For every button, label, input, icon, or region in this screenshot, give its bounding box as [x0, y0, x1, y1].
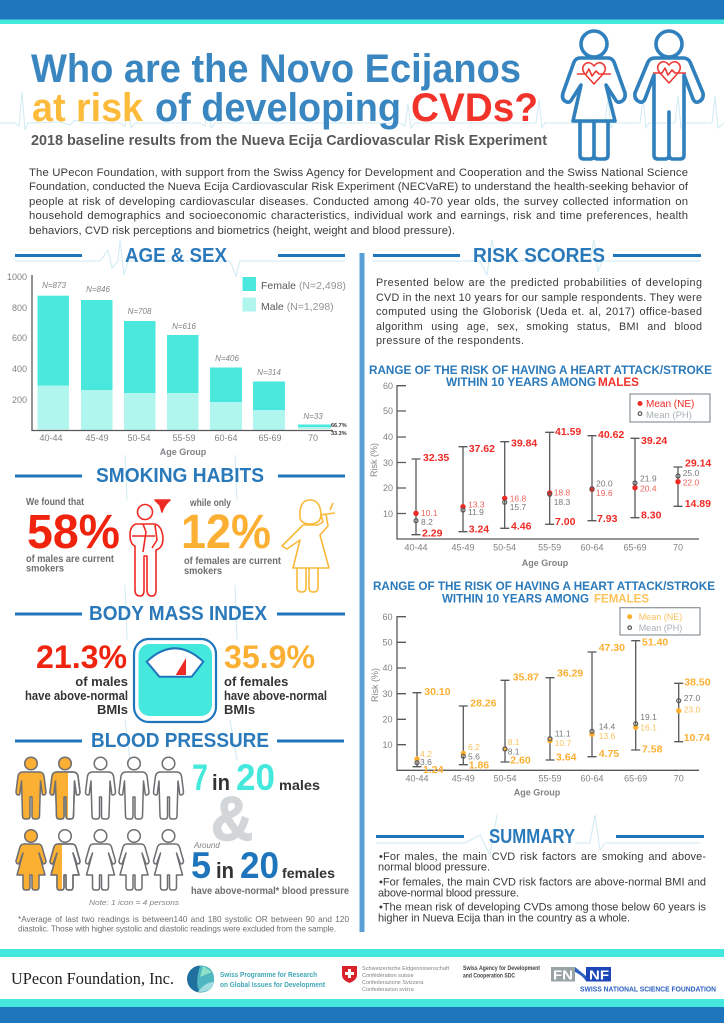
- range chart: males: 19.6: [596, 488, 613, 498]
- range chart: males: 21.9: [640, 474, 657, 484]
- stat: 7 in 20 males: [192, 757, 320, 798]
- panel: male smokers: of males are current: [26, 554, 115, 565]
- risk scores description: pressure of the respondents.: [376, 335, 524, 347]
- bar chart: age and sex: 1000: [7, 272, 27, 282]
- logo: FNS SNF: [551, 967, 716, 994]
- range chart: males: 11.9: [468, 507, 484, 517]
- panel: female BMI: BMIs: [224, 702, 255, 717]
- range chart: females: 50: [382, 638, 392, 648]
- risk scores description: CVD in the next 10 years for our sample respondents. They were: [376, 292, 702, 304]
- range chart: females: Age Group: [514, 788, 561, 798]
- range chart: males: 40-44: [404, 543, 428, 553]
- range chart: females: 4.2: [420, 749, 432, 759]
- range chart: males: 15.7: [510, 502, 527, 512]
- range chart: males: 3.24: [469, 524, 489, 536]
- range chart: males: 8.30: [641, 510, 662, 522]
- bar chart: age and sex: 33.3%: [331, 431, 347, 437]
- footnote: [18, 915, 349, 934]
- stat: 5 in 20 females: females: [282, 865, 335, 881]
- range chart: females: 8.1: [508, 746, 520, 756]
- range chart: males: 45-49: [451, 543, 475, 553]
- range chart: females: 3.64: [556, 752, 577, 764]
- bar chart: age and sex: N=846: [86, 285, 110, 294]
- range chart: males: 20: [383, 483, 393, 493]
- stat: 5 in 20 females: 5: [191, 845, 211, 886]
- stat: 7 in 20 males: in: [212, 770, 230, 795]
- range chart: females: 13.6: [599, 731, 616, 741]
- range chart: females: 6.2: [468, 742, 480, 752]
- logo: Swiss Confederation: Confederaziun svizra: [362, 987, 415, 993]
- range chart: females: 30: [382, 689, 392, 699]
- heading: body mass index: [15, 603, 345, 625]
- intro paragraph: The UPecon Foundation, with support from the Swiss Agency for Development and Cooperation and the Swiss National Science: [29, 167, 688, 179]
- icon: female smoker: [282, 500, 335, 592]
- logo: Swiss Confederation: [342, 966, 449, 993]
- logo: Swiss Programme: on Global Issues for Development: [220, 982, 326, 989]
- bar chart: age and sex: Age Group: [160, 447, 207, 457]
- intro paragraph: people at risk of developing cardiovascular diseases. Conducted among 40-70 year olds, the survey collected information on: [29, 196, 688, 208]
- bar chart: age and sex: [7, 272, 347, 457]
- range chart: females: 4.75: [599, 748, 619, 760]
- range chart: males: 20.4: [640, 484, 657, 494]
- range chart: females: 50-54: [493, 774, 517, 784]
- range chart: females: 60: [382, 612, 392, 622]
- range chart: males: 8.2: [421, 517, 433, 527]
- bar chart: age and sex: 70: [308, 433, 318, 443]
- heading: blood pressure: BLOOD PRESSURE: [91, 730, 269, 752]
- range chart: females: 35.87: [513, 672, 539, 684]
- range chart: males: 40.62: [598, 429, 624, 441]
- bar chart: age and sex: 66.7%: [331, 423, 347, 429]
- range chart: females: 16.1: [640, 723, 657, 733]
- logo: UPecon Foundation: UPecon Foundation, Inc.: [11, 969, 174, 988]
- panel: male BMI: 21.3%: [36, 639, 127, 675]
- range chart: males: 25.0: [683, 468, 700, 478]
- logo: Swiss Confederation: Schweizerische Eidgenossenschaft: [362, 966, 449, 972]
- pictogram: males with high blood pressure: [16, 757, 184, 819]
- bar chart: age and sex: N=873: [42, 281, 66, 290]
- range chart: males: 50: [383, 406, 393, 416]
- range chart: females: 45-49: [452, 774, 475, 784]
- range chart: males: 14.89: [685, 498, 711, 510]
- heading: age & sex: AGE & SEX: [125, 245, 228, 267]
- chart title: females: [373, 579, 715, 606]
- panel: female BMI: have above-normal: [224, 688, 327, 703]
- range chart: males: 30: [383, 458, 393, 468]
- range chart: females: 10.74: [684, 732, 710, 744]
- range chart: females: 23.0: [684, 705, 701, 715]
- range chart: females: 10.7: [555, 738, 572, 748]
- chart title: females: RANGE OF THE RISK OF HAVING A HEART ATTACK/STROKE: [373, 579, 715, 593]
- range chart: males: Mean (NE): [646, 399, 694, 410]
- panel: male BMI: [25, 639, 128, 717]
- heading: smoking habits: SMOKING HABITS: [96, 465, 264, 487]
- range chart: males: 65-69: [623, 543, 647, 553]
- logo: FNS SNF: FN: [553, 968, 573, 982]
- stat: 7 in 20 males: 20: [236, 757, 275, 798]
- range chart: females: 36.29: [557, 668, 583, 680]
- range chart: females: 2.60: [510, 754, 531, 766]
- summary bullets: [378, 851, 706, 925]
- panel: female BMI: of females: [224, 674, 288, 689]
- logo: Swiss Confederation: Confédération suisse: [362, 973, 414, 979]
- logo: SDC: Swiss Agency for Development: [463, 966, 540, 972]
- range chart: females: 20: [382, 714, 392, 724]
- range chart: females: 5.6: [468, 751, 480, 761]
- footnote: *Average of last two readings is between140 and 180 systolic OR between 90 and 120: [18, 915, 349, 924]
- panel: female BMI: 35.9%: [224, 639, 315, 675]
- range chart: females: 27.0: [684, 693, 701, 703]
- range chart: females: 10: [382, 740, 392, 750]
- range chart: males: 50-54: [493, 543, 516, 553]
- heading: summary: [376, 826, 704, 848]
- range chart: females: 30.10: [424, 686, 451, 698]
- panel: male smokers: We found that: [26, 497, 85, 508]
- top colour band: [0, 0, 724, 24]
- range chart: females: [370, 608, 711, 798]
- intro paragraph: behaviors, CVD risk perceptions and biometrics (height, weight and blood pressure).: [29, 225, 455, 237]
- panel: female smokers: smokers: [184, 566, 222, 577]
- panel: female smokers: of females are current: [184, 556, 282, 567]
- range chart: males: 18.3: [554, 497, 571, 507]
- range chart: males: 55-59: [538, 543, 561, 553]
- bar chart: age and sex: N=616: [172, 322, 196, 331]
- heading: risk scores: RISK SCORES: [473, 245, 605, 267]
- icon: weighing scale: [134, 639, 216, 722]
- logo: SDC: [463, 966, 540, 980]
- range chart: females: 1.86: [469, 759, 489, 771]
- bar chart: age and sex: 200: [12, 395, 27, 405]
- range chart: males: Risk (%): [369, 443, 379, 477]
- range chart: females: 8.1: [508, 737, 520, 747]
- panel: male BMI: have above-normal: [25, 688, 128, 703]
- panel: male smokers: 58%: [27, 506, 120, 559]
- range chart: females: 11.1: [555, 729, 571, 739]
- chart title: males: [369, 363, 712, 389]
- bar chart: age and sex: 45-49: [85, 433, 109, 443]
- heading: blood pressure: [15, 730, 344, 752]
- logo: Swiss Programme: [187, 966, 326, 992]
- range chart: males: 29.14: [685, 458, 711, 470]
- title: [31, 47, 538, 130]
- panel: female smokers: [181, 498, 282, 577]
- range chart: males: 22.0: [683, 478, 700, 488]
- range chart: males: 37.62: [469, 443, 495, 455]
- stat: 5 in 20 females: Around: [193, 841, 220, 850]
- range chart: males: 39.84: [511, 438, 537, 450]
- range chart: males: 20.0: [596, 479, 613, 489]
- bar chart: age and sex: N=314: [257, 368, 281, 377]
- range chart: females: 47.30: [599, 642, 625, 654]
- stat: 5 in 20 females: have above-normal* blood pressure: [191, 885, 349, 897]
- range chart: females: 55-59: [538, 774, 562, 784]
- chart title: females: WITHIN 10 YEARS AMONG: [442, 592, 589, 606]
- range chart: females: 14.4: [599, 721, 616, 731]
- stat: 5 in 20 females: in: [216, 858, 234, 883]
- pictogram note: Note: 1 icon = 4 persons: [89, 898, 179, 907]
- bar chart: age and sex: 50-54: [127, 433, 151, 443]
- summary bullets: •The mean risk of developing CVDs among those below 60 years is: [379, 902, 706, 914]
- stat: 7 in 20 males: males: [279, 777, 320, 793]
- chart title: males: RANGE OF THE RISK OF HAVING A HEART ATTACK/STROKE: [369, 363, 712, 377]
- range chart: females: Mean (NE): [639, 612, 682, 622]
- risk scores description: [376, 277, 702, 347]
- logo: Swiss Confederation: Confederazione Svizzera: [362, 980, 424, 986]
- panel: female smokers: while only: [189, 498, 231, 509]
- intro paragraph: Foundation, conducted the Nueva Ecija Cardiovascular Risk Experiment (NECVaRE) to understand the health-seeking behavior of: [29, 181, 689, 193]
- range chart: males: 10.1: [421, 508, 438, 518]
- range chart: males: Mean (PH): [646, 410, 692, 421]
- summary bullets: above-normal blood pressure.: [378, 888, 519, 900]
- range chart: females: Mean (PH): [639, 623, 682, 633]
- range chart: females: 51.40: [642, 637, 668, 649]
- panel: male smokers: smokers: [26, 564, 64, 574]
- range chart: females: 40-44: [405, 774, 429, 784]
- range chart: males: 32.35: [423, 452, 449, 464]
- ampersand: &: [211, 785, 253, 854]
- range chart: males: [369, 381, 711, 568]
- stat: 7 in 20 males: 7: [192, 757, 208, 798]
- bar chart: age and sex: N=33: [303, 412, 323, 421]
- panel: male smokers: [26, 497, 120, 574]
- risk scores description: algorithm using age, sex, smoking status, BMI and blood: [376, 321, 702, 333]
- risk scores description: computed using the Globorisk (Ueda et. al, 2017) office-based: [376, 306, 702, 318]
- bar chart: age and sex: N=708: [128, 307, 152, 316]
- logo: FNS SNF: NF: [589, 968, 609, 982]
- bar chart: age and sex: 55-59: [172, 433, 196, 443]
- footer bands: [0, 949, 724, 1023]
- chart title: females: FEMALES: [594, 592, 649, 606]
- range chart: males: Age Group: [522, 558, 569, 568]
- range chart: females: 38.50: [684, 677, 711, 689]
- range chart: females: Risk (%): [370, 668, 380, 702]
- range chart: females: 19.1: [640, 712, 657, 722]
- bar chart: age and sex: 40-44: [39, 433, 63, 443]
- logo: SDC: and Cooperation SDC: [463, 974, 516, 980]
- stat: 5 in 20 females: 20: [240, 845, 279, 886]
- icon: female and male figures with hearts: [562, 31, 703, 159]
- column divider: [360, 253, 364, 932]
- bar chart: age and sex: Female (N=2,498): [261, 280, 346, 292]
- range chart: females: 65-69: [624, 774, 647, 784]
- summary bullets: higher in Nueva Ecija than in the country as a whole.: [378, 913, 630, 925]
- stat: 5 in 20 females: [191, 841, 349, 897]
- range chart: males: 70: [673, 543, 683, 553]
- title: at risk: [32, 86, 144, 130]
- bar chart: age and sex: 60-64: [214, 433, 238, 443]
- bar chart: age and sex: N=406: [215, 354, 239, 363]
- range chart: males: 18.8: [554, 488, 571, 498]
- range chart: females: 60-64: [580, 774, 604, 784]
- range chart: males: 10: [383, 509, 393, 519]
- heading: summary: SUMMARY: [489, 826, 576, 848]
- range chart: males: 40: [383, 432, 393, 442]
- chart title: males: WITHIN 10 YEARS AMONG: [446, 375, 596, 389]
- logo: Swiss Programme: Swiss Programme for Research: [220, 972, 317, 979]
- bar chart: age and sex: Male (N=1,298): [261, 301, 334, 313]
- pictogram: females with high blood pressure: [16, 830, 184, 890]
- heading: risk scores: [373, 245, 701, 267]
- summary bullets: •For males, the main CVD risk factors are smoking and above-: [379, 851, 706, 863]
- range chart: males: 60: [383, 381, 393, 391]
- range chart: females: 40: [382, 663, 392, 673]
- intro paragraph: household demographics and socioeconomic characteristics, individual work and earnings, risk and time preferences, health: [29, 210, 688, 222]
- range chart: males: 2.29: [422, 528, 443, 540]
- risk scores description: Presented below are the predicted probabilities of developing: [376, 277, 702, 289]
- bar chart: age and sex: 600: [12, 333, 27, 343]
- range chart: males: 16.8: [510, 494, 527, 504]
- icon: male smoker: [130, 500, 170, 596]
- bar chart: age and sex: 400: [12, 364, 27, 374]
- range chart: males: 41.59: [555, 426, 581, 438]
- range chart: males: 4.46: [511, 520, 532, 532]
- range chart: males: 13.3: [468, 499, 485, 509]
- range chart: females: 1.24: [423, 764, 444, 776]
- title: of developing: [155, 86, 401, 130]
- heading: age & sex: [15, 245, 345, 267]
- range chart: females: 7.58: [642, 744, 663, 756]
- range chart: females: 28.26: [470, 698, 497, 710]
- heading: smoking habits: [15, 465, 345, 487]
- heading: body mass index: BODY MASS INDEX: [89, 603, 268, 625]
- panel: male BMI: BMIs: [97, 702, 128, 717]
- summary bullets: •For females, the main CVD risk factors are above-normal BMI and: [379, 877, 706, 889]
- panel: female smokers: 12%: [181, 506, 271, 559]
- summary bullets: normal blood pressure.: [378, 862, 490, 874]
- footnote: diastolic. Those with higher systolic and diastolic readings were excluded from the sample.: [18, 924, 336, 934]
- subtitle: 2018 baseline results from the Nueva Ecija Cardiovascular Risk Experiment: [31, 132, 547, 149]
- chart title: males: MALES: [598, 375, 639, 389]
- range chart: males: 7.93: [597, 513, 618, 525]
- bar chart: age and sex: 800: [12, 303, 27, 313]
- intro paragraph: [29, 167, 689, 237]
- range chart: males: 39.24: [641, 435, 667, 447]
- panel: male BMI: of males: [75, 674, 128, 689]
- bar chart: age and sex: 65-69: [258, 433, 282, 443]
- range chart: females: 3.6: [420, 757, 432, 767]
- panel: female BMI: [224, 639, 327, 717]
- range chart: males: 60-64: [580, 543, 604, 553]
- range chart: males: 7.00: [555, 516, 576, 528]
- title: CVDs?: [411, 86, 538, 130]
- title: Who are the Novo Ecijanos: [31, 47, 521, 91]
- range chart: females: 70: [674, 774, 684, 784]
